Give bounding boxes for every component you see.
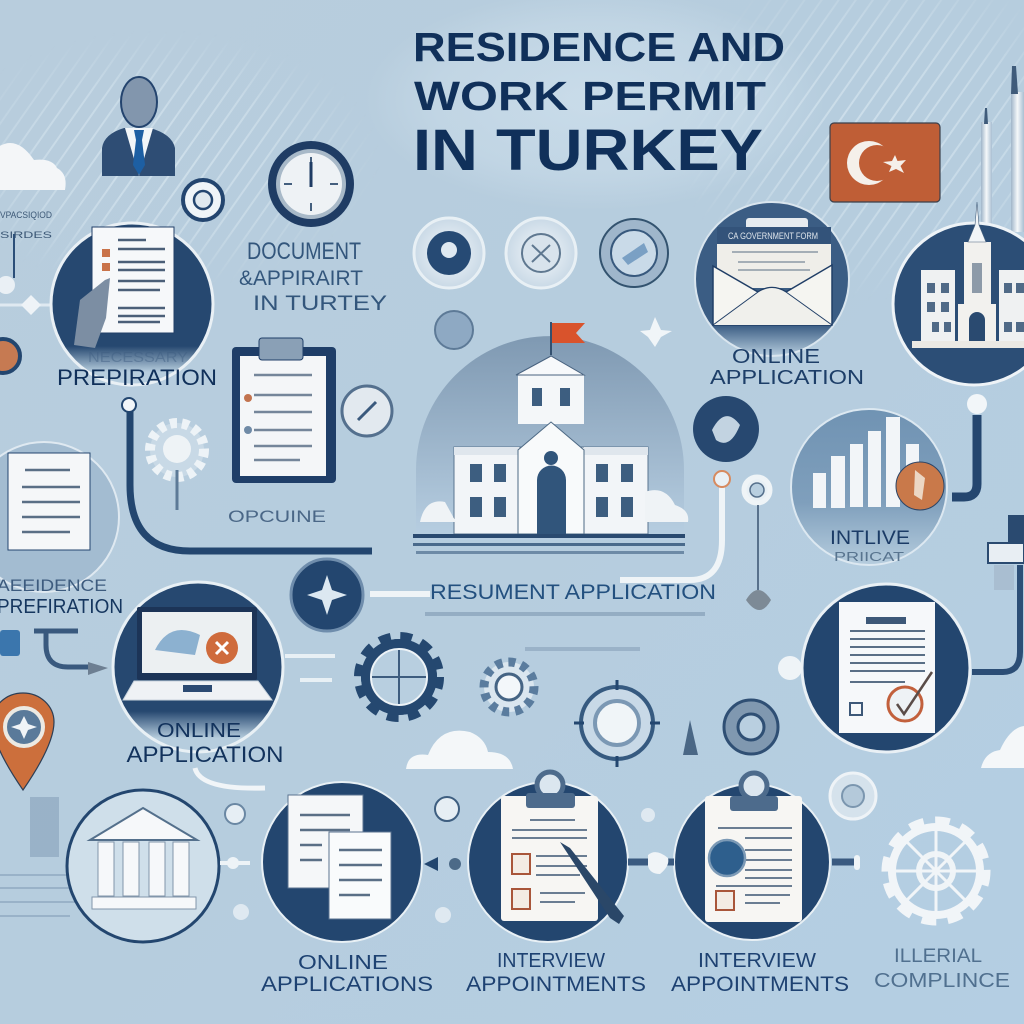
icon: faded city left [0,797,80,916]
icon: connector dot [122,398,136,412]
icon: cloud center [406,731,513,769]
panel: growth chart: PRIICAT [834,549,904,564]
icon: left faded edge items [0,339,108,675]
panel: online application envelope [695,202,864,389]
label: legal compliance: COMPLINCE [874,970,1010,992]
icon: cloud right [981,726,1024,768]
heading: document appraisal: &APPIRAIRT [239,267,363,290]
arrow: right connector [972,565,1020,672]
panel: laptop: ONLINE [157,720,241,742]
label: legal compliance [874,946,1010,992]
icon: dark badge [693,396,759,462]
icon: white connector dot [778,656,802,680]
panel: interview appointments 2 [671,773,849,996]
panel: residence preparation [0,442,123,618]
icon: right mini building [988,515,1024,590]
panel: courthouse [67,790,219,942]
panel: interview appointments 1: INTERVIEW [497,950,605,972]
title: RESIDENCE AND [413,24,785,70]
arrow: white connector right of laptop [285,656,335,680]
panel: preparation: PREPIRATION [57,365,217,390]
arrows: bottom connectors [220,852,860,874]
icon: dark gear [361,639,437,715]
connector: left edge to preparation [0,234,50,315]
panel: online applications: ONLINE [298,952,388,974]
icon: figure [683,720,698,755]
icon: ring with pendant [744,477,771,610]
icon: ring target [574,680,660,767]
arrow: long connector [130,405,372,551]
icon: businessman [102,77,175,176]
icon: connector ring [714,471,730,487]
icon: small ring [183,180,223,220]
icon: cloud left [0,143,66,190]
icon: location pin [0,693,54,790]
panel: growth chart [791,409,947,565]
garbled note left: SIRDES [0,230,52,240]
panel: online application envelope: ONLINE [732,346,820,368]
panel: online application envelope: APPLICATION [710,367,864,389]
flag [830,123,940,202]
garbled note left [0,210,52,240]
panel: interview appointments 2: APPOINTMENTS [671,973,849,996]
panel: interview appointments 2: INTERVIEW [698,950,816,972]
heading: document appraisal: IN TURTEY [253,292,387,315]
icon: faint gear [150,423,204,510]
panel: central building [413,317,688,554]
arrow: white connector under laptop [195,768,265,788]
icon: light gear [484,662,534,712]
heading: document appraisal: DOCUMENT [247,238,361,265]
icon: star button [291,559,363,631]
panel: online applications [261,782,433,996]
arrow: center connector [370,486,722,594]
panel: city building [893,202,1024,385]
icon: faded ring [225,773,876,923]
skyline right [981,66,1024,237]
panel: clipboard: OPCUINE [228,507,326,526]
icon: connector pin [967,394,987,414]
label: legal compliance: ILLERIAL [894,946,982,967]
arrow: chart to building [952,415,977,497]
icon: spiral badge [724,700,778,754]
panel: interview appointments 1 [466,772,646,996]
panel: online applications: APPLICATIONS [261,973,433,996]
panel: signed document [802,584,970,752]
heading: document appraisal [239,238,387,315]
garbled note left: VPACSIQIOD [0,210,52,220]
title: WORK PERMIT [414,73,766,119]
panel: preparation: NECESSARY [88,349,188,366]
label: resident application: RESUMENT APPLICATION [430,581,716,604]
title [413,24,785,183]
icon row top [414,218,668,349]
panel: laptop: APPLICATION [126,742,284,767]
icon: white gear bottom right [888,823,984,919]
panel: laptop [113,582,284,767]
panel: clipboard [228,338,392,526]
panel: growth chart: INTLIVE [830,528,910,549]
panel: preparation [51,223,217,390]
title: IN TURKEY [413,118,763,183]
panel: residence preparation: PREFIRATION [0,596,123,618]
panel: interview appointments 1: APPOINTMENTS [466,973,646,996]
panel: online application envelope: CA GOVERNMENT FORM [728,231,818,241]
background [2,5,1020,254]
faint line text [425,612,705,651]
icon: wall clock [268,141,354,227]
